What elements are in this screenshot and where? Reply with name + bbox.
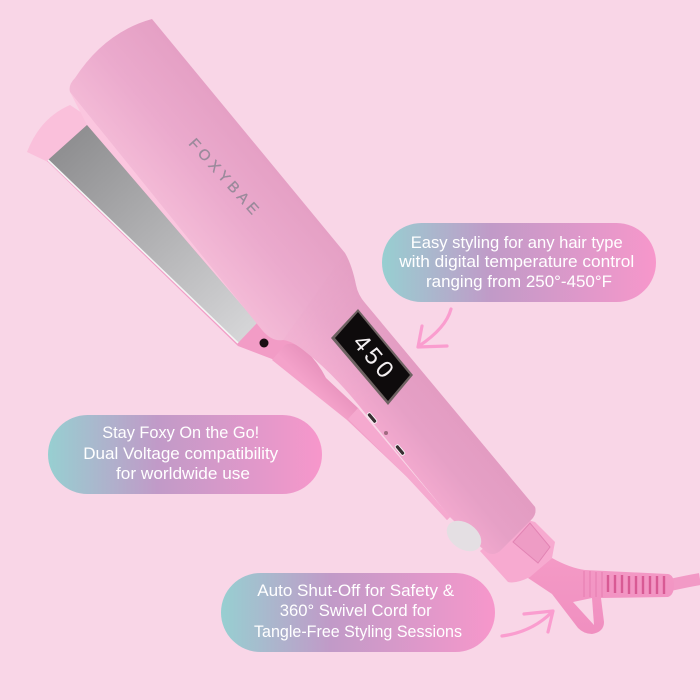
- arrow: to display: [418, 309, 451, 347]
- callout: auto shut-off: [221, 573, 495, 652]
- temperature display: [331, 309, 413, 405]
- callout: dual voltage: Dual Voltage compatibility: [83, 445, 279, 463]
- slider switch: [513, 523, 550, 563]
- swivel base and hook: [528, 558, 674, 634]
- callout: dual voltage: [48, 415, 322, 494]
- upper body: [70, 19, 536, 554]
- callout: temperature: Easy styling for any hair type: [411, 234, 623, 252]
- callout: auto shut-off: Tangle-Free Styling Sessions: [254, 623, 462, 641]
- power cord: [670, 579, 700, 585]
- callout: temperature: with digital temperature control: [398, 253, 634, 271]
- callout: auto shut-off: Auto Shut-Off for Safety &: [257, 582, 454, 600]
- handle lower segment: [348, 408, 450, 520]
- hook opening: [573, 598, 594, 625]
- plate lower edge: [47, 125, 312, 368]
- callout: temperature: ranging from 250°-450°F: [426, 273, 612, 291]
- plate edge highlight: [48, 160, 238, 343]
- swivel ridges: [584, 571, 602, 597]
- callout: dual voltage: for worldwide use: [116, 465, 250, 483]
- lower body shading: [326, 312, 536, 554]
- lower arm handle: [272, 344, 450, 520]
- silver disc: [441, 514, 487, 558]
- logo: FOXYBAE: [185, 135, 262, 218]
- gap strip between plate and body: [70, 92, 262, 330]
- indicator dot: [260, 338, 268, 348]
- callout: dual voltage: Stay Foxy On the Go!: [102, 424, 259, 442]
- lower arm tip: [27, 105, 100, 162]
- arrow: to swivel cord: [502, 611, 553, 636]
- control buttons: [367, 412, 405, 456]
- callout: auto shut-off: 360° Swivel Cord for: [280, 602, 432, 620]
- ceramic plate: [48, 125, 257, 343]
- temperature display: 450: [347, 329, 401, 387]
- callout: temperature: [382, 223, 656, 302]
- swivel ribs: [608, 575, 664, 594]
- end cap: [480, 518, 555, 582]
